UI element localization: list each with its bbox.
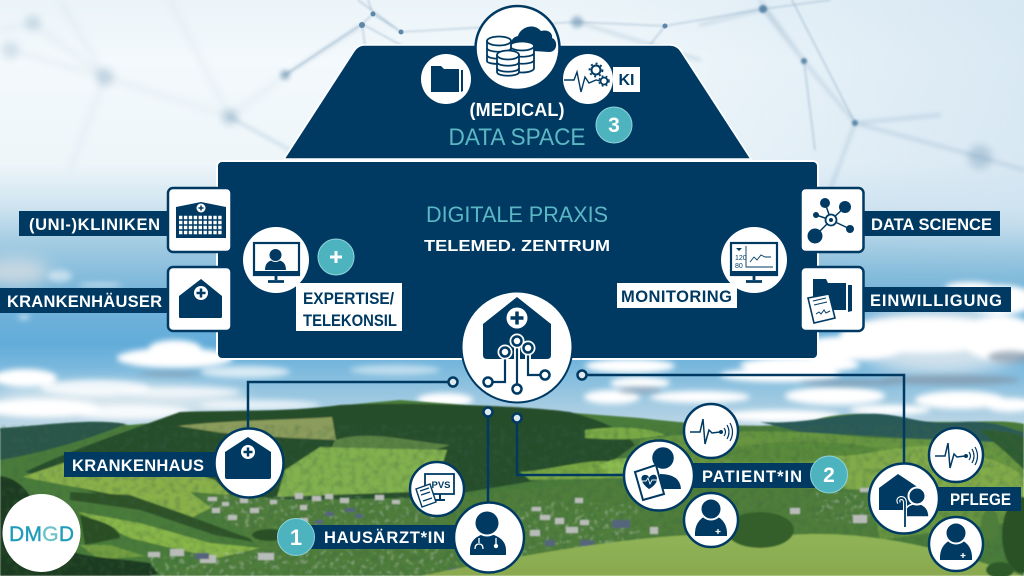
heading: medical: (MEDICAL)	[470, 100, 564, 120]
badge: 1	[278, 518, 314, 556]
village speckle	[150, 490, 870, 576]
badge: 2	[810, 456, 848, 493]
label: krankenhäuser	[0, 288, 171, 313]
label: hausärzt*in: HAUSÄRZT*IN	[324, 529, 445, 547]
icon: monitoring monitor: 80	[735, 263, 743, 270]
label: expertise telekonsil: TELEKONSIL	[303, 312, 397, 330]
left fields	[22, 462, 232, 517]
icon card: hospital	[168, 267, 232, 331]
badge: 3	[596, 107, 632, 143]
icon: monitoring monitor: 120	[735, 255, 747, 262]
panel: digitale praxis	[217, 161, 818, 359]
label: hausärzt*in	[296, 525, 460, 549]
connector: pflege	[587, 375, 904, 464]
icon card: consent documents	[800, 267, 864, 331]
icon: krankenhaus	[214, 428, 284, 498]
label: einwilligung: EINWILLIGUNG	[870, 292, 1002, 310]
label: krankenhäuser: KRANKENHÄUSER	[7, 293, 162, 311]
logo: DMGD: DMGD	[9, 523, 74, 546]
heading: digitale praxis: DIGITALE PRAXIS	[426, 202, 608, 227]
label: krankenhaus	[64, 452, 216, 477]
village and valley	[150, 480, 880, 576]
heading: data space: DATA SPACE	[448, 124, 586, 151]
mottled texture	[0, 425, 1024, 576]
label: monitoring	[617, 283, 737, 308]
houses	[148, 488, 870, 563]
label: pflege	[938, 487, 1021, 511]
icon: ECG with gears	[563, 54, 613, 104]
background: sky	[0, 0, 1024, 432]
icon card: data science network	[800, 188, 864, 252]
label: patient*in	[693, 463, 815, 488]
main forest	[25, 404, 635, 500]
logo: DMGD	[2, 494, 80, 572]
icon: nurse	[684, 493, 738, 547]
label: patient*in: PATIENT*IN	[702, 468, 802, 486]
background: network nodes	[1, 5, 992, 169]
label: monitoring: MONITORING	[621, 288, 732, 306]
connector nodes	[448, 370, 586, 422]
icon: pflege home	[869, 464, 939, 534]
background: landscape	[0, 400, 1024, 576]
label: pflege: PFLEGE	[950, 491, 1011, 509]
icon: monitoring monitor	[721, 227, 787, 293]
icon: PVS	[410, 462, 464, 516]
badge: plus	[318, 239, 354, 275]
icon: nurse pflege	[929, 517, 983, 571]
label: KI: KI	[618, 72, 634, 89]
label: krankenhaus: KRANKENHAUS	[72, 457, 204, 475]
icon: folder	[421, 54, 471, 104]
icon: PVS: PVS	[431, 480, 451, 491]
label: uni-kliniken: (UNI-)KLINIKEN	[29, 216, 160, 234]
connector: hausarzt	[487, 416, 489, 502]
right-side fields	[620, 431, 1024, 540]
far ridges	[0, 400, 1024, 576]
connector: patient	[517, 422, 625, 475]
icon: ecg wearable	[684, 404, 738, 458]
label: expertise telekonsil	[296, 283, 402, 331]
icon: central digital practice	[462, 292, 572, 402]
badge: 1: 1	[290, 525, 302, 550]
label: uni-kliniken	[19, 211, 171, 236]
panel: medical data space trapezoid	[284, 45, 751, 159]
icon: hausärzt*in	[454, 502, 524, 572]
label: einwilligung	[863, 287, 1011, 312]
background: data network	[0, 0, 1024, 190]
tree belts	[0, 476, 160, 576]
badge: 2: 2	[823, 464, 835, 487]
icon: cloud database	[476, 6, 560, 90]
icon: patient with tablet	[624, 440, 694, 510]
label: data science: DATA SCIENCE	[871, 216, 992, 234]
icon card: clinic building	[168, 188, 232, 252]
connector: krankenhaus	[248, 382, 448, 428]
label: expertise telekonsil: EXPERTISE/	[303, 290, 394, 308]
foreground hill	[420, 534, 1024, 576]
label: data science	[863, 211, 1000, 236]
background: clouds	[0, 258, 1024, 422]
badge: 3: 3	[608, 114, 620, 137]
icon: telemedicine monitor	[243, 227, 309, 293]
icon: ecg wearable pflege	[929, 428, 983, 482]
label: KI	[613, 67, 640, 92]
heading: telemed zentrum: TELEMED. ZENTRUM	[424, 238, 610, 255]
